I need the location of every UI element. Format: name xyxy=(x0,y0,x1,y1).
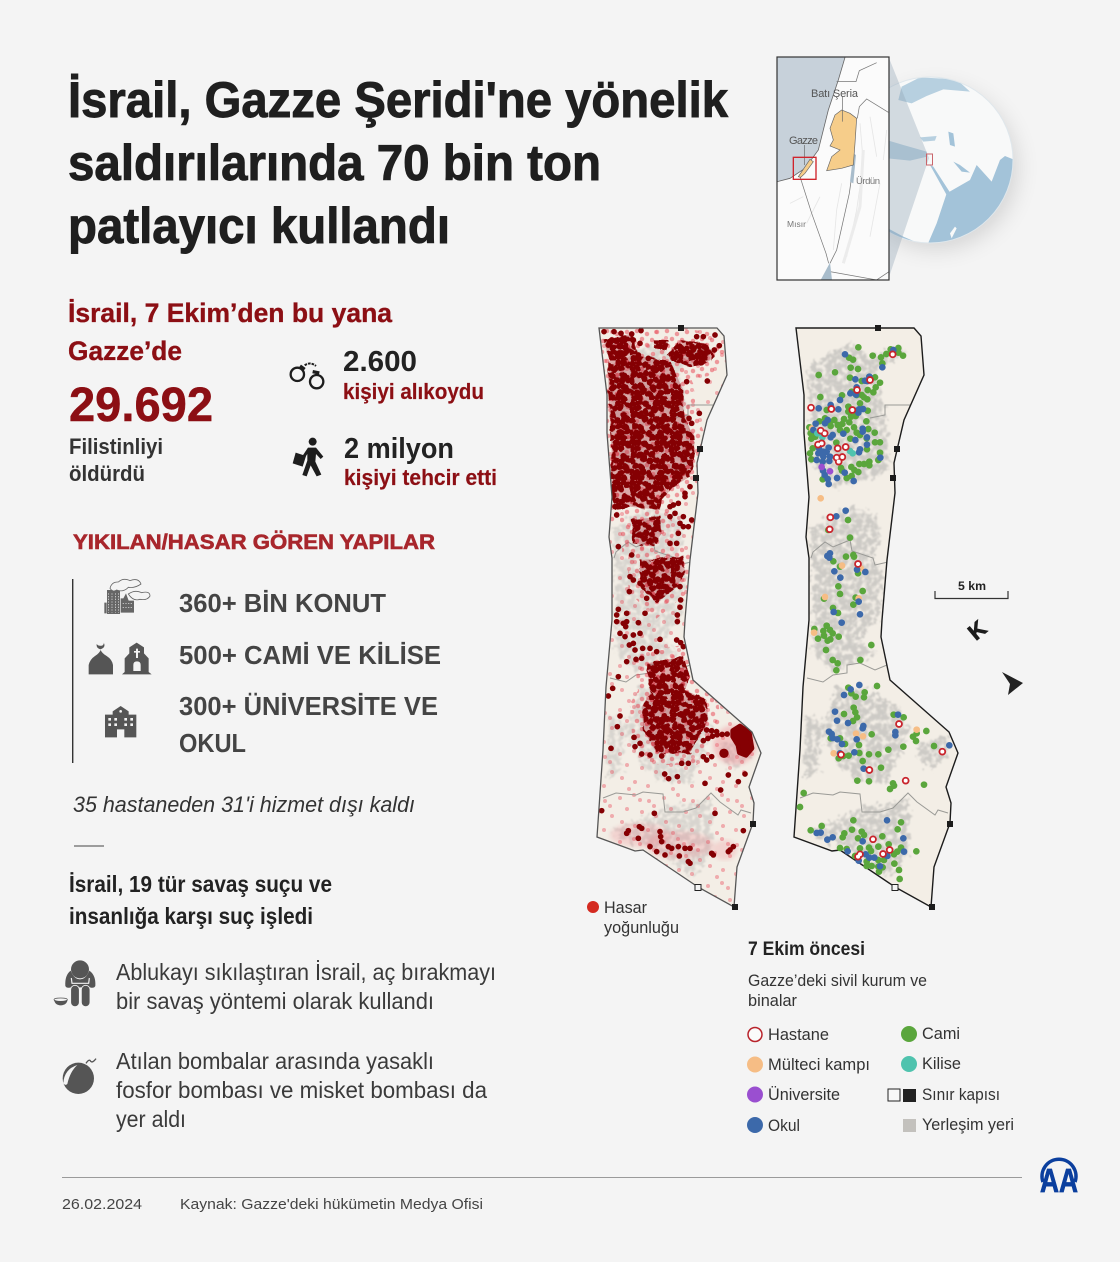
title: saldırılarında 70 bin ton xyxy=(68,135,601,191)
legend: settlement: Yerleşim yeri xyxy=(922,1115,1014,1134)
stat: killed xyxy=(69,379,213,486)
war crimes heading: İsrail, 19 tür savaş suçu ve xyxy=(69,871,332,897)
heading: destroyed structures: YIKILAN/HASAR GÖREN YAPILAR xyxy=(73,531,435,554)
stat: killed: 29.692 xyxy=(69,379,213,432)
border gates xyxy=(678,325,756,910)
scale bar: 5 km xyxy=(958,579,986,593)
locator map: globe and inset xyxy=(777,57,1016,280)
title: İsrail, Gazze Şeridi'ne yönelik xyxy=(68,72,728,128)
north marker: K xyxy=(963,616,991,645)
text: starvation xyxy=(116,959,496,1014)
legend: school xyxy=(747,1116,800,1135)
stat: displaced xyxy=(344,433,497,490)
hospital note: 35 hastaneden 31'i hizmet dışı kaldı xyxy=(73,792,415,817)
icon: starving person with bowl xyxy=(54,960,95,1007)
inset labels: Batı Şeria xyxy=(811,88,859,100)
map: damage density xyxy=(597,325,761,910)
key figures heading xyxy=(68,298,393,366)
legend: church xyxy=(901,1054,961,1073)
vertical rule xyxy=(72,579,73,763)
stat: killed: öldürdü xyxy=(69,461,145,486)
inset map: Ürdün xyxy=(856,176,880,187)
stat: detained: kişiyi alıkoydu xyxy=(343,379,484,404)
legend: mosque xyxy=(901,1024,960,1043)
legend: facilities xyxy=(747,939,1014,1135)
key figures heading: Gazze’de xyxy=(68,336,182,366)
war crimes heading xyxy=(69,871,332,929)
legend heading: 7 Ekim öncesi xyxy=(748,939,865,960)
legend: damage density xyxy=(587,898,679,937)
legend heading: Gazze’deki sivil kurum ve xyxy=(748,971,927,990)
scale bar xyxy=(935,579,1008,598)
text: starvation: bir savaş yöntemi olarak kullandı xyxy=(116,988,434,1014)
title: patlayıcı kullandı xyxy=(68,198,450,254)
map: civilian facilities before 7 October xyxy=(794,325,958,910)
inset map: Gazze xyxy=(789,135,818,147)
legend: border gate xyxy=(888,1085,1000,1104)
stat: detained xyxy=(343,346,484,404)
projection cone xyxy=(889,58,929,277)
stat: universities and schools xyxy=(179,691,438,758)
stat: universities and schools: OKUL xyxy=(179,728,246,758)
footer source: Kaynak: Gazze'deki hükümetin Medya Ofisi xyxy=(180,1196,483,1213)
legend: border gate: Sınır kapısı xyxy=(922,1085,1000,1104)
icon: handcuffs xyxy=(291,363,323,388)
legend: church: Kilise xyxy=(922,1054,961,1073)
icon: school xyxy=(105,706,136,737)
text: banned bombs xyxy=(116,1048,487,1132)
footer date: 26.02.2024 xyxy=(62,1196,142,1213)
legend: damage density: Hasar xyxy=(604,898,647,917)
icon: displaced person with suitcase xyxy=(293,438,323,476)
legend heading: binalar xyxy=(748,991,797,1010)
stat: universities and schools: 300+ ÜNİVERSİTE VE xyxy=(179,691,438,721)
legend: hospital: Hastane xyxy=(768,1025,829,1044)
north and central facility dots xyxy=(809,347,903,614)
legend heading xyxy=(748,939,927,1010)
stat: mosques and churches: 500+ CAMİ VE KİLİSE xyxy=(179,640,441,670)
legend: refugee camp: Mülteci kampı xyxy=(768,1055,870,1074)
text: banned bombs: yer aldı xyxy=(116,1106,186,1132)
war crimes heading: insanlığa karşı suç işledi xyxy=(69,903,313,929)
stat: homes: 360+ BİN KONUT xyxy=(179,588,386,618)
stat: displaced: kişiyi tehcir etti xyxy=(344,465,497,490)
legend: school: Okul xyxy=(768,1116,800,1135)
north arrow xyxy=(1002,672,1023,695)
legend: university: Üniversite xyxy=(768,1085,840,1104)
text: starvation: Ablukayı sıkılaştıran İsrail, aç bırakmayı xyxy=(116,959,496,985)
stat: displaced: 2 milyon xyxy=(344,433,454,465)
stat: killed: Filistinliyi xyxy=(69,434,163,459)
key figures heading: İsrail, 7 Ekim’den bu yana xyxy=(68,298,393,328)
south facility dots xyxy=(800,623,949,879)
icon: damaged buildings xyxy=(104,579,150,614)
stat: detained: 2.600 xyxy=(343,346,417,378)
title xyxy=(68,72,728,254)
inset map xyxy=(777,57,889,280)
AA logo: AA xyxy=(1040,1162,1078,1199)
legend: mosque: Cami xyxy=(922,1024,960,1043)
globe marker xyxy=(926,154,932,165)
icon: bomb xyxy=(63,1059,96,1094)
legend: damage density: yoğunluğu xyxy=(604,918,679,937)
icon: mosque and church xyxy=(89,642,152,674)
inset map: Mısır xyxy=(787,219,806,229)
globe xyxy=(890,76,1024,256)
text: banned bombs: Atılan bombalar arasında yasaklı xyxy=(116,1048,434,1074)
text: banned bombs: fosfor bombası ve misket bombası da xyxy=(116,1077,487,1103)
